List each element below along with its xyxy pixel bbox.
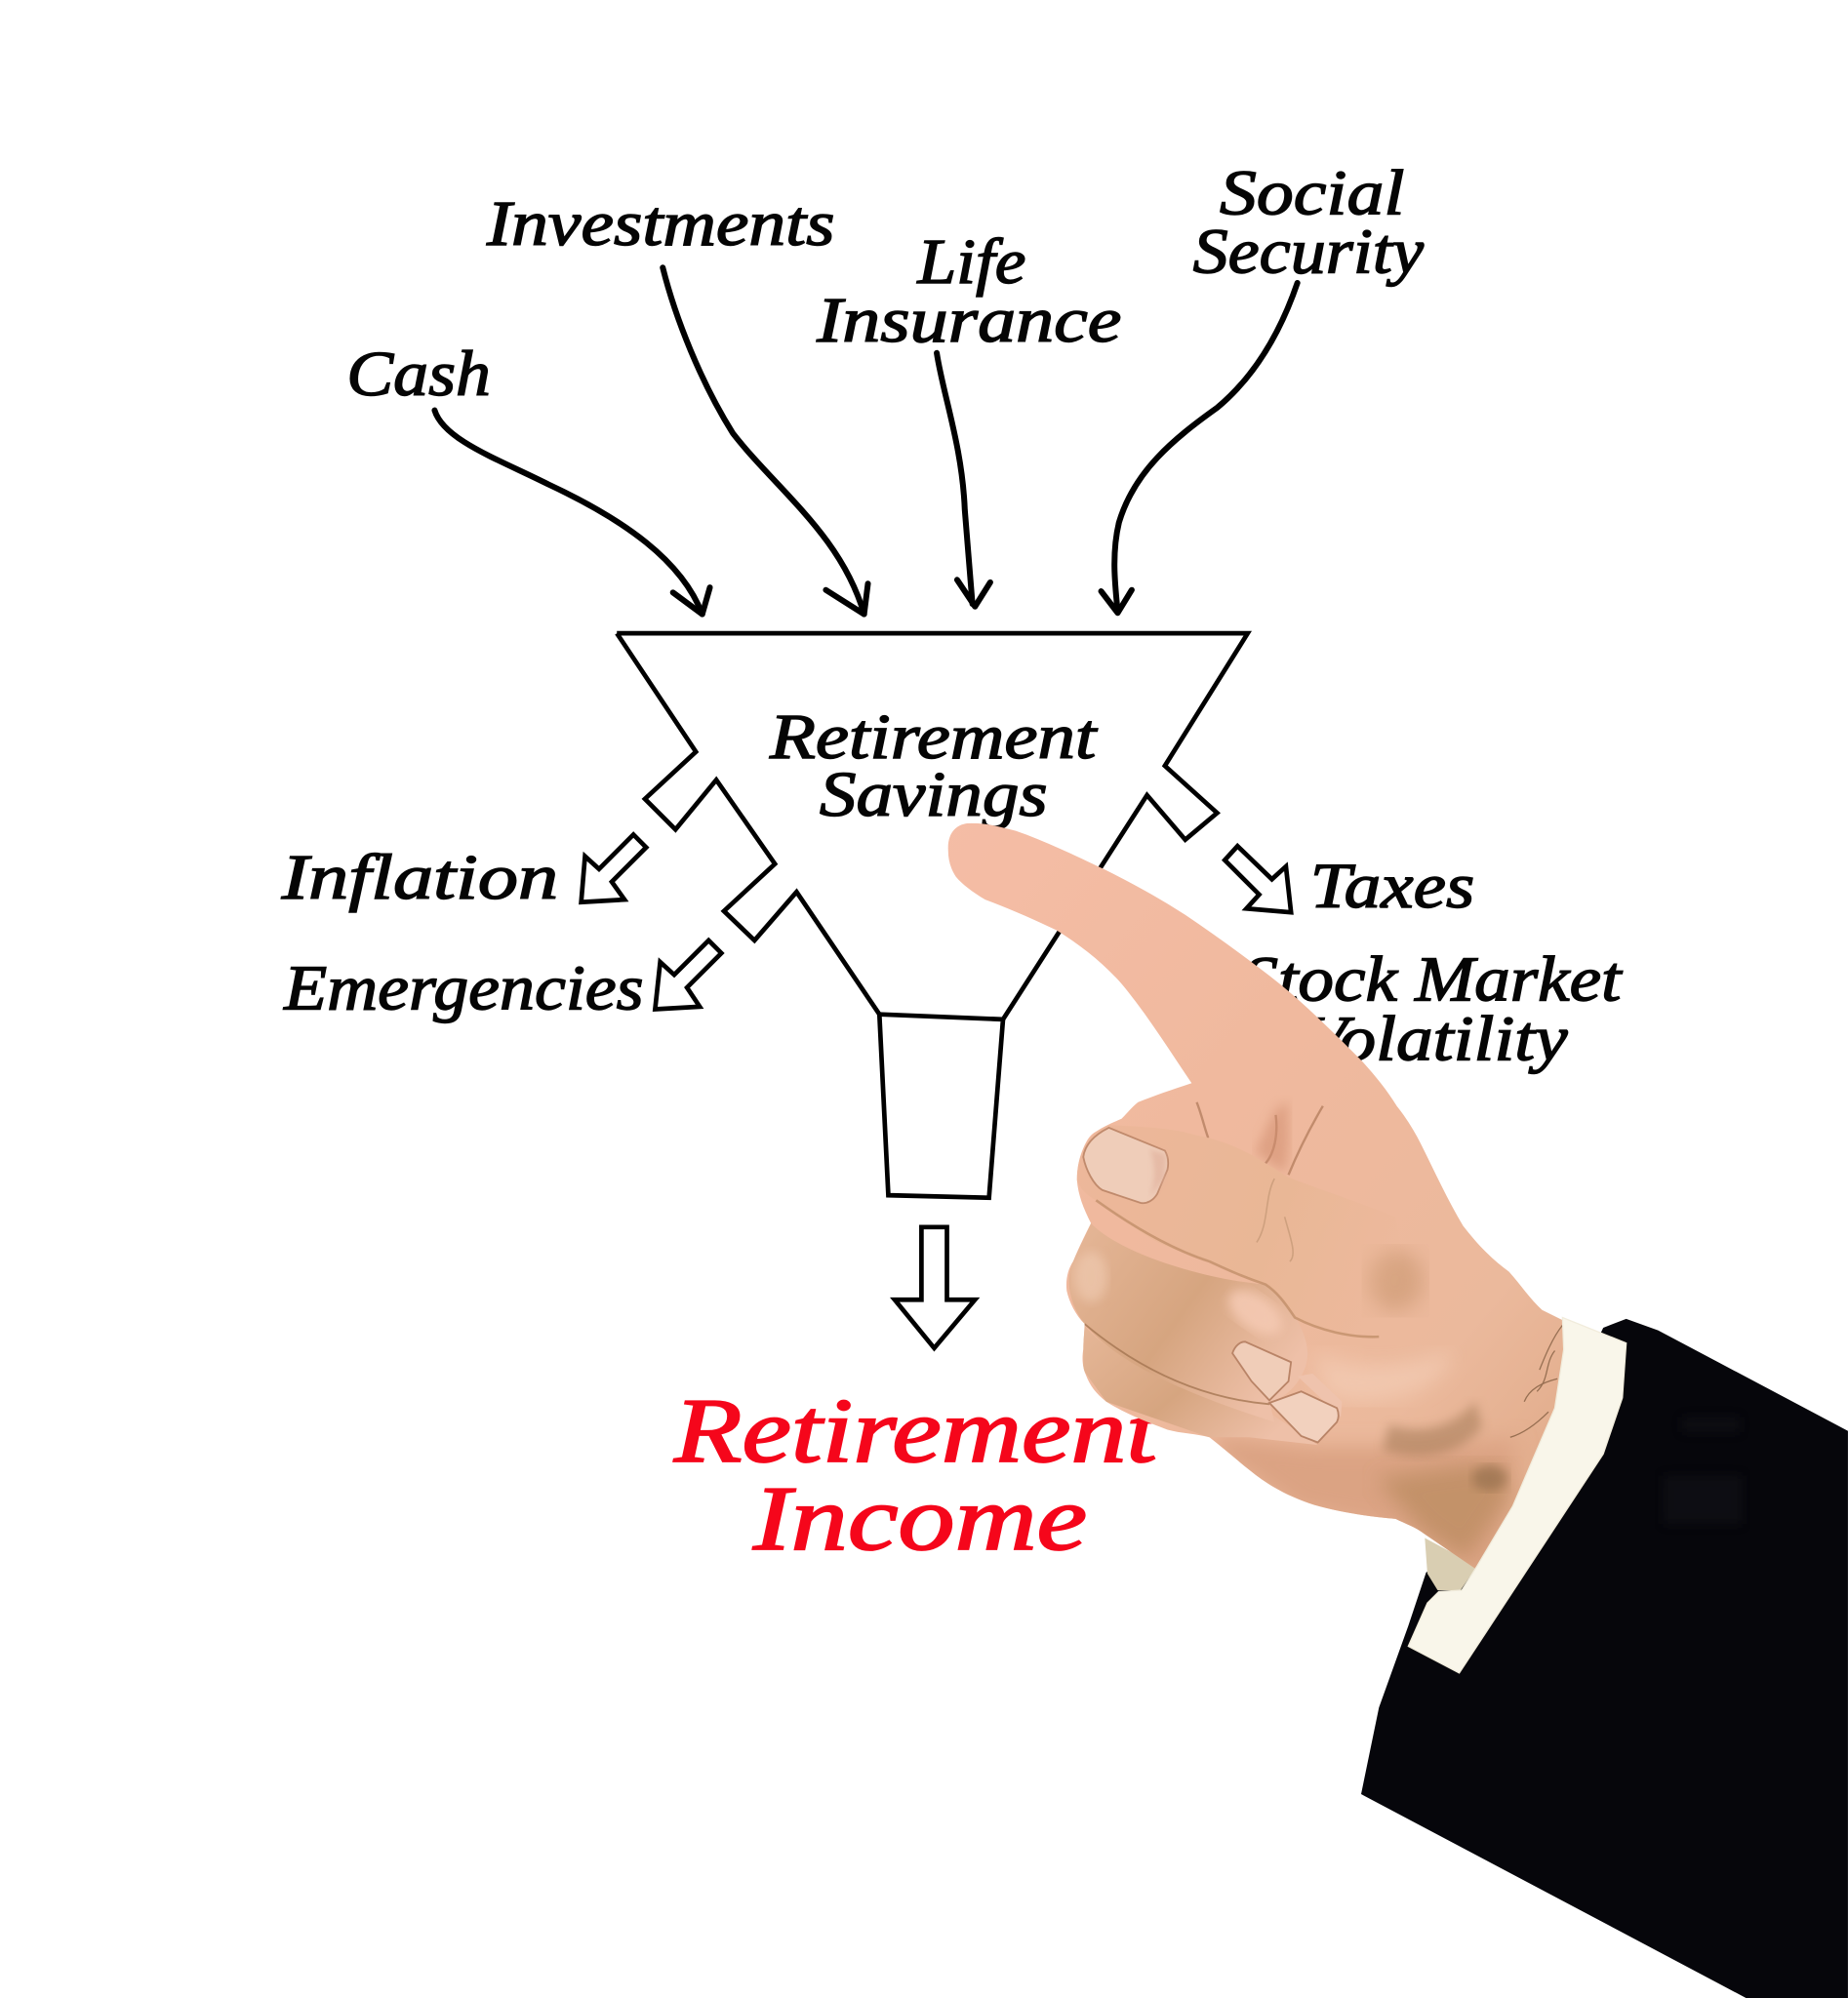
shirt cuff [1408, 1318, 1627, 1673]
arrow: Life Insurance to funnel [937, 353, 990, 607]
palm underside [1212, 1438, 1510, 1567]
shirt inner cuff [1425, 1538, 1477, 1590]
arrow: Emergencies outflow [655, 940, 721, 1009]
suit sleeve [1361, 1319, 1848, 1998]
arrow: Taxes outflow [1225, 846, 1291, 912]
label: Social Security [1193, 158, 1425, 288]
label: Life Insurance: Life [916, 227, 1025, 298]
wrist shading [1377, 1465, 1510, 1561]
wrist highlight [1319, 1358, 1444, 1402]
thumb nail [1083, 1128, 1168, 1203]
funnel label: Retirement Savings: Savings [820, 760, 1048, 830]
label: Stock Market Volatility: Volatility [1303, 1005, 1569, 1075]
label: Life Insurance: Insurance [816, 286, 1121, 356]
label: Social Security: Social [1220, 158, 1404, 228]
arrow: Social Security to funnel [1102, 283, 1298, 613]
finger crease [1085, 1324, 1269, 1404]
label: Stock Market Volatility: Stock Market [1243, 944, 1624, 1015]
thumb [1077, 1128, 1266, 1180]
label: Taxes: Taxes [1310, 852, 1474, 922]
label: Inflation: Inflation [280, 843, 558, 913]
funnel label: Retirement Savings: Retirement [769, 702, 1098, 773]
wrist hair [1510, 1325, 1562, 1437]
extra finger sliver [1298, 1374, 1342, 1417]
middle finger [1069, 1223, 1307, 1422]
arrow: Inflation outflow [582, 835, 646, 902]
thumb knuckle wrinkle [1257, 1179, 1293, 1261]
pointing hand [931, 816, 1581, 1580]
back of hand tone [1368, 1250, 1424, 1311]
lower finger [1083, 1324, 1318, 1445]
wrist hollow [1472, 1465, 1507, 1491]
funnel spout [879, 1015, 1003, 1198]
funnel label: Retirement Savings [769, 702, 1098, 830]
finger tip highlight [1225, 1288, 1282, 1335]
knuckle highlight [1074, 1252, 1107, 1302]
ring finger nail [1269, 1391, 1339, 1443]
arrow: savings to income [895, 1227, 975, 1348]
fold between index and middle [1197, 1102, 1323, 1175]
result: Retirement Income: Income [752, 1468, 1087, 1570]
thumb underside shadow [1096, 1200, 1379, 1337]
label: Social Security: Security [1193, 218, 1425, 288]
suit fabric sheen [1664, 1417, 1743, 1524]
middle finger nail [1232, 1341, 1291, 1400]
label: Emergencies: Emergencies [283, 953, 644, 1023]
infographic canvas [280, 169, 1848, 1998]
label: Stock Market Volatility [1243, 944, 1624, 1075]
label: Investments: Investments [486, 189, 835, 260]
palm crease shadow [1383, 1402, 1482, 1456]
label: Cash: Cash [346, 340, 491, 410]
arrow: Cash to funnel [434, 411, 710, 615]
result: Retirement Income: Retirement [673, 1380, 1159, 1482]
thumb nail base tone [1151, 1151, 1168, 1190]
label: Life Insurance [816, 227, 1121, 356]
funnel outline [617, 633, 1248, 1019]
arrow: Investments to funnel [663, 267, 868, 615]
fold shadow [1256, 1102, 1289, 1173]
result: Retirement Income [673, 1380, 1159, 1570]
hand silhouette [931, 816, 1581, 1580]
